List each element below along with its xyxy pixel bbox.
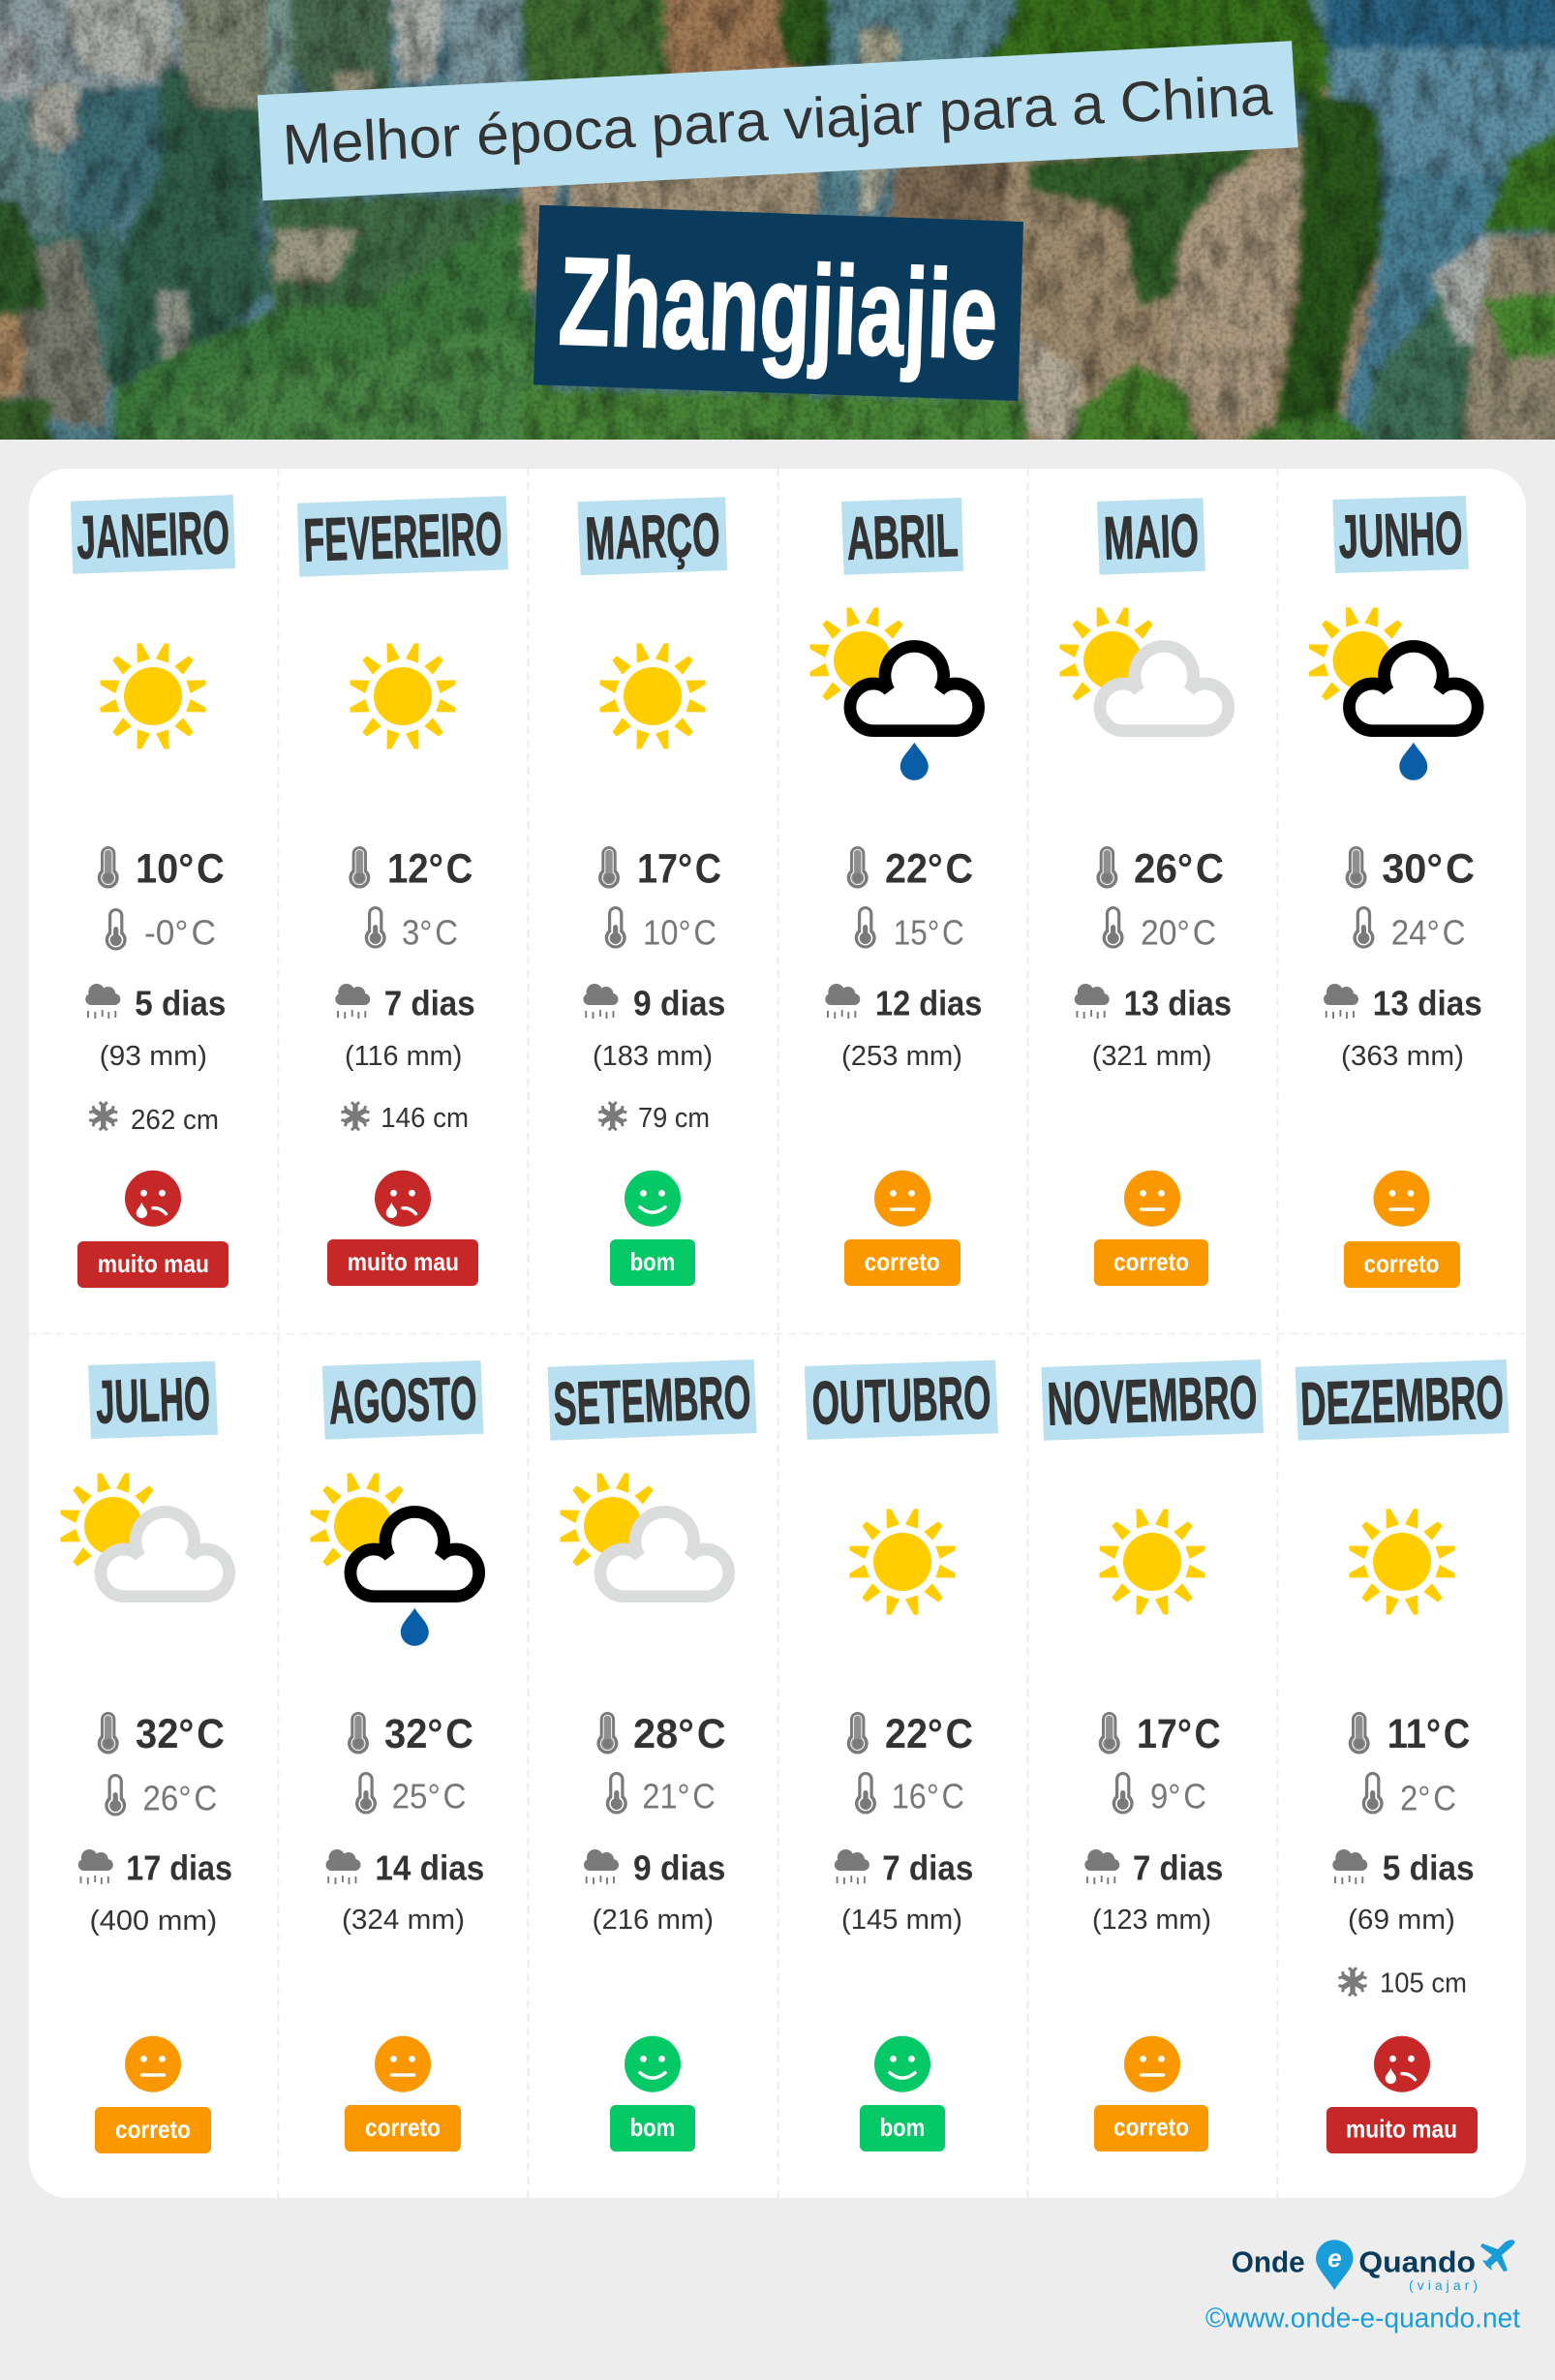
weather icon: sun xyxy=(1350,1510,1454,1614)
rainy days: 13 dias xyxy=(1124,983,1232,1022)
month label: Agosto: AGOSTO xyxy=(327,1364,478,1437)
rating face xyxy=(1124,1171,1180,1227)
month label: Outubro: OUTUBRO xyxy=(810,1363,992,1438)
high temperature: 17°C xyxy=(637,846,721,893)
rainy days: 7 dias xyxy=(1133,1848,1223,1888)
month label: Novembro xyxy=(1041,1359,1264,1441)
month label: Maio xyxy=(1097,498,1205,575)
month label: Setembro: SETEMBRO xyxy=(552,1363,752,1439)
month label: Setembro xyxy=(548,1359,757,1441)
rainfall: (93 mm) xyxy=(100,1041,207,1072)
low temperature: 9°C xyxy=(1150,1776,1206,1816)
rainy days xyxy=(1084,1848,1223,1888)
high temperature xyxy=(1096,846,1224,893)
low temperature xyxy=(365,906,458,953)
low temperature xyxy=(855,906,964,953)
high temperature: 22°C xyxy=(885,1711,973,1757)
high temperature xyxy=(349,846,473,893)
rating pill: muito mau xyxy=(348,1247,459,1276)
rainy days: 13 dias xyxy=(1373,983,1482,1022)
high temperature: 11°C xyxy=(1387,1711,1470,1757)
rating pill xyxy=(1094,2105,1208,2151)
weather icon: sun xyxy=(1100,1510,1204,1614)
month label: Julho xyxy=(88,1361,218,1439)
rating pill xyxy=(345,2105,461,2151)
high temperature xyxy=(348,1711,473,1757)
column: Fevereiro xyxy=(297,496,508,1286)
rating pill: bom xyxy=(630,1247,675,1276)
high temperature xyxy=(598,846,721,893)
column: Março xyxy=(577,497,727,1286)
snowfall xyxy=(1338,1968,1467,1999)
snowfall: 262 cm xyxy=(131,1105,219,1136)
weather icon: sun, grey cloud xyxy=(1060,608,1229,731)
rating face xyxy=(874,1171,930,1227)
month label: Fevereiro xyxy=(297,496,508,577)
snowfall xyxy=(341,1102,469,1134)
month label: Julho: JULHO xyxy=(95,1365,211,1437)
rainfall: (253 mm) xyxy=(841,1041,962,1072)
low temperature: 20°C xyxy=(1141,912,1216,953)
snowfall: 146 cm xyxy=(381,1103,469,1134)
rainfall: (183 mm) xyxy=(593,1041,713,1072)
rainy days xyxy=(825,983,982,1022)
rating pill xyxy=(77,1241,229,1288)
high temperature: 22°C xyxy=(885,846,973,893)
high temperature xyxy=(847,1711,973,1757)
month label: Abril: ABRIL xyxy=(845,502,960,573)
rainy days: 14 dias xyxy=(375,1848,484,1888)
weather icon: sun, grey cloud xyxy=(61,1474,229,1597)
rainy days: 9 dias xyxy=(633,983,725,1022)
low temperature xyxy=(855,1772,964,1816)
rainy days xyxy=(325,1848,484,1888)
header photo: Zhangjiajie stone pillars xyxy=(0,0,1555,484)
column: Outubro xyxy=(805,1360,998,2151)
website credit: ©www.onde-e-quando.net xyxy=(1205,2303,1520,2334)
rainy days: 5 dias xyxy=(135,983,226,1022)
low temperature xyxy=(1353,906,1466,953)
low temperature xyxy=(355,1772,467,1816)
rainy days xyxy=(1324,983,1482,1022)
rating pill: correto xyxy=(865,1247,940,1276)
rating pill: bom xyxy=(630,2113,675,2142)
column: Julho xyxy=(61,1361,232,2153)
weather icon: sun, dark cloud, rain drop xyxy=(1309,608,1478,780)
high temperature: 30°C xyxy=(1382,846,1475,893)
logo: Onde e Quando (viajar): (viajar) xyxy=(1409,2277,1478,2293)
high temperature xyxy=(1349,1711,1470,1757)
logo: Onde e Quando (viajar) xyxy=(1232,2240,1514,2293)
month label: Abril xyxy=(841,498,963,575)
rainy days: 17 dias xyxy=(126,1848,232,1888)
weather icon: sun xyxy=(600,644,705,748)
main white card xyxy=(29,469,1526,2198)
rainfall: (123 mm) xyxy=(1092,1905,1211,1936)
rating face xyxy=(1373,1171,1429,1227)
rainy days: 5 dias xyxy=(1383,1848,1475,1888)
rating pill: correto xyxy=(1363,1249,1439,1278)
column: Junho xyxy=(1309,496,1482,1288)
rating face xyxy=(375,1171,431,1227)
snowfall: 105 cm xyxy=(1380,1968,1467,1999)
rating pill: correto xyxy=(365,2113,441,2142)
column: Maio xyxy=(1060,498,1232,1286)
rainfall: (145 mm) xyxy=(841,1905,962,1936)
icon: map pin xyxy=(1316,2240,1354,2290)
rainy days xyxy=(1075,983,1232,1022)
rainfall: (321 mm) xyxy=(1092,1041,1212,1072)
weather icon: sun, dark cloud, rain drop xyxy=(810,608,979,780)
month label: Novembro: NOVEMBRO xyxy=(1046,1363,1259,1439)
high temperature xyxy=(1099,1711,1221,1757)
high temperature: 32°C xyxy=(384,1711,473,1757)
rating face xyxy=(1374,2036,1430,2092)
rating face xyxy=(1124,2036,1180,2092)
column: Novembro xyxy=(1041,1359,1264,2151)
rating pill: muito mau xyxy=(1346,2115,1457,2144)
low temperature xyxy=(105,1774,217,1818)
high temperature xyxy=(98,846,225,893)
rating pill xyxy=(1326,2107,1478,2153)
high temperature xyxy=(98,1711,225,1757)
rating pill: correto xyxy=(1113,2113,1189,2142)
rainfall: (400 mm) xyxy=(89,1906,217,1937)
column: Janeiro xyxy=(71,495,235,1288)
month label: Maio: MAIO xyxy=(1103,502,1200,573)
rating pill xyxy=(844,1239,960,1286)
rainy days xyxy=(335,983,475,1022)
rainfall: (324 mm) xyxy=(342,1905,465,1936)
weather icon: sun xyxy=(101,644,205,748)
rainy days: 7 dias xyxy=(882,1848,973,1888)
low temperature: 2°C xyxy=(1400,1779,1456,1818)
low temperature xyxy=(1113,1772,1206,1816)
rainfall: (363 mm) xyxy=(1341,1041,1464,1072)
rating pill: muito mau xyxy=(98,1249,209,1278)
low temperature: 16°C xyxy=(892,1776,964,1816)
low temperature xyxy=(606,1772,716,1816)
rating face xyxy=(125,2036,181,2092)
rating face xyxy=(874,2036,930,2092)
rainy days: 9 dias xyxy=(633,1848,725,1888)
low temperature: -0°C xyxy=(144,912,216,953)
rainfall: (216 mm) xyxy=(593,1905,714,1936)
rating face xyxy=(125,1171,181,1227)
low temperature: 25°C xyxy=(392,1776,467,1816)
rainy days: 7 dias xyxy=(384,983,475,1022)
month label: Junho xyxy=(1332,496,1469,573)
icon: map pin: e xyxy=(1327,2243,1342,2273)
month label: Janeiro: JANEIRO xyxy=(76,499,230,572)
low temperature: 10°C xyxy=(643,912,717,953)
month label: Janeiro xyxy=(71,495,235,574)
rainfall: (116 mm) xyxy=(345,1041,462,1072)
low temperature: 24°C xyxy=(1391,912,1466,953)
title banner: Zhangjiajie xyxy=(534,205,1023,401)
icon: airplane xyxy=(1480,2240,1514,2272)
rating pill xyxy=(860,2105,945,2151)
low temperature xyxy=(1362,1772,1456,1818)
rating pill: correto xyxy=(1113,1247,1189,1276)
low temperature: 15°C xyxy=(894,912,964,953)
low temperature: 26°C xyxy=(142,1779,217,1818)
column: Agosto xyxy=(311,1360,484,2151)
snowfall: 79 cm xyxy=(638,1103,710,1134)
low temperature xyxy=(106,908,216,953)
high temperature: 10°C xyxy=(136,846,225,893)
high temperature xyxy=(847,846,973,893)
rainy days xyxy=(1332,1848,1475,1888)
column: Setembro xyxy=(548,1359,757,2151)
high temperature: 26°C xyxy=(1134,846,1224,893)
month label: Fevereiro: FEVEREIRO xyxy=(302,500,503,575)
snowfall xyxy=(598,1102,710,1134)
high temperature: 12°C xyxy=(387,846,473,893)
month label: Março xyxy=(577,497,727,575)
rainy days xyxy=(835,1848,973,1888)
low temperature xyxy=(605,906,717,953)
rating pill xyxy=(610,2105,695,2151)
subtitle banner: Melhor época para viajar para a China xyxy=(281,63,1274,177)
rainfall: (69 mm) xyxy=(1348,1905,1455,1936)
logo: Onde e Quando (viajar): Quando xyxy=(1358,2245,1476,2279)
month label: Outubro xyxy=(805,1360,998,1440)
rainy days xyxy=(85,983,226,1022)
month label: Março: MARÇO xyxy=(584,501,721,573)
rating pill: correto xyxy=(115,2115,191,2144)
month label: Agosto xyxy=(322,1360,483,1440)
rating pill xyxy=(1094,1239,1208,1286)
rainy days xyxy=(78,1848,232,1888)
high temperature: 17°C xyxy=(1137,1711,1221,1757)
weather icon: sun xyxy=(850,1510,955,1614)
weather icon: sun xyxy=(351,644,455,748)
low temperature xyxy=(1103,906,1216,953)
column: Abril xyxy=(810,498,982,1286)
weather icon: sun, dark cloud, rain drop xyxy=(311,1474,479,1646)
rating face xyxy=(625,2036,681,2092)
logo: Onde e Quando (viajar): Onde xyxy=(1232,2245,1305,2279)
column: Dezembro xyxy=(1296,1359,1509,2153)
low temperature: 3°C xyxy=(402,912,458,953)
rating pill xyxy=(1344,1241,1460,1288)
high temperature: 28°C xyxy=(633,1711,726,1757)
high temperature: 32°C xyxy=(136,1711,225,1757)
month label: Junho: JUNHO xyxy=(1337,500,1464,571)
rating pill: bom xyxy=(880,2113,925,2142)
rating pill xyxy=(610,1239,695,1286)
rating pill xyxy=(95,2107,211,2153)
title banner: Zhangjiajie: Zhangjiajie xyxy=(557,231,1000,385)
rating face xyxy=(375,2036,431,2092)
rating pill xyxy=(327,1239,478,1286)
rainy days xyxy=(584,1848,725,1888)
snowfall xyxy=(89,1102,219,1136)
subtitle banner xyxy=(258,41,1298,200)
rainy days: 12 dias xyxy=(875,983,982,1022)
weather icon: sun, grey cloud xyxy=(561,1474,729,1597)
rainy days xyxy=(583,983,725,1022)
low temperature: 21°C xyxy=(642,1776,716,1816)
rating face xyxy=(625,1171,681,1227)
